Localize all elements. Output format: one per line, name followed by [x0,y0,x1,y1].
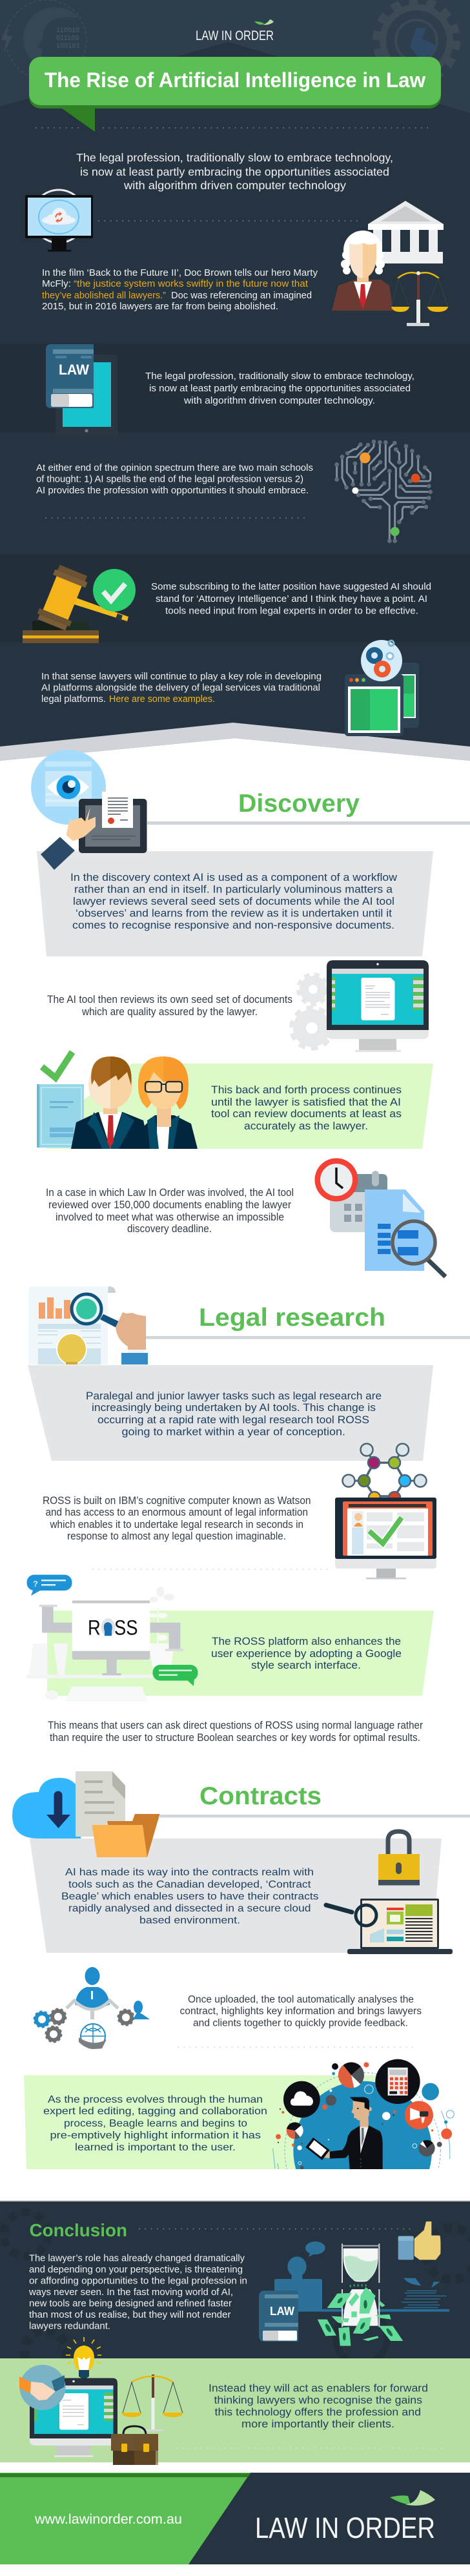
icon: laptop with magnifier [326,1899,453,1954]
back and forth paragraph: tool can review documents at least as [211,1108,402,1120]
text: key role: AI platforms alongside the delivery of legal services via traditional [41,682,320,694]
discovery paragraph: In the discovery context AI is used as a component of a workflow [70,872,397,883]
icon: businessman with tablet and data bubbles [272,2059,455,2169]
icon: law book and tablet [46,344,118,438]
panel: conclusion [0,2200,470,2371]
text: Back to the Future [42,267,318,312]
dotted divider under title [36,127,431,129]
text: ROSS built on Watson [43,1495,311,1542]
small pies [287,2122,435,2156]
text: AI tool seed set: which are quality assured by the lawyer. [81,1006,258,1018]
text: schools of thought: AI provides the profession with opportunities it should embrace. [36,485,309,496]
conclusion paragraph: or affording opportunities to the legal profession in [29,2276,247,2286]
Beagle paragraph: learned is important to the user. [75,2142,236,2153]
table and silhouette [274,2241,449,2312]
conclusion paragraph: The lawyer’s role has already changed dramatically [29,2252,245,2264]
enablers paragraph [209,2383,428,2430]
ROSS platform paragraph: style search interface. [251,1660,361,1671]
chat bubble blue: ? [33,1579,38,1589]
text: ROSS built on Watson: and has access to an enormous amount of legal information [45,1507,308,1518]
heading: Contracts [159,1782,470,1817]
text: schools of thought: of thought: 1) AI spells the end of the legal profession versus 2) [36,474,303,484]
heading: Conclusion: Conclusion [30,2220,127,2240]
conclusion paragraph: than most of us realise, but they will not render [29,2309,231,2320]
contracts paragraph: based environment. [139,1915,240,1926]
text: key role: legal platforms. [41,694,106,705]
icon: conclusion illustration [259,2221,449,2346]
contracts paragraph: Beagle’ which enables users to have their contracts [61,1891,319,1902]
icon: monitor, bulb, handshake, scales and briefcase [19,2337,183,2465]
panel: enablers [0,2358,470,2462]
icon: monitor with check [335,1498,436,1580]
discovery paragraph: lawyer reviews several seed sets of documents while the AI tool [73,896,394,907]
text: once uploaded: contract, highlights key information and brings lawyers [179,2006,422,2017]
text: Back to the Future: 2015, but in 2016 lawyers are far from being abolished. [42,301,278,312]
logo: Law In Order (footer): LAW IN ORDER [255,2511,435,2544]
dotted divider [139,2228,411,2229]
discovery paragraph: comes to recognise responsive and non-responsive documents. [72,920,394,931]
icon: padlock [378,1831,420,1886]
pie chart top [338,2062,364,2088]
icon: cloud, document and folder [12,1771,160,1857]
computer [72,1600,150,1675]
discovery paragraph [70,872,397,931]
text: 150,000 documents [46,1187,294,1235]
intro text: The legal profession, traditionally slow to embrace technology, [76,151,393,164]
enablers paragraph: thinking lawyers who recognise the gains [214,2395,422,2406]
icon: tablet and phone with gears [345,640,419,736]
text: legal profession band: is now at least partly embracing the opportunities associated [149,383,411,394]
logo: Law In Order (top): LAW IN ORDER [196,28,274,43]
back and forth paragraph: until the lawyer is satisfied that the AI [211,1097,401,1108]
law book [259,2291,298,2342]
cloud badge [283,2081,320,2117]
logo: Law In Order (footer) [255,2490,435,2544]
footer URL: www.lawinorder.com.au [34,2512,182,2527]
text: direct questions of ROSS [48,1720,423,1744]
text: Back to the Future: “the justice system works swiftly in the future now that [74,278,309,289]
discovery paragraph: rather than an end in itself. In particularly voluminous matters a [74,884,393,896]
text: Back to the Future: they’ve abolished all lawyers.” [42,290,166,301]
text: once uploaded [179,1994,422,2029]
contracts paragraph [61,1867,319,1926]
icon: courthouse [368,201,444,263]
text: key role: Here are some examples. [109,694,215,705]
text: direct questions of ROSS: than require the user to structure Boolean searches or key words for optimal results. [50,1732,420,1744]
icon: circuit brain [334,440,433,543]
icon: lawyers with document and check [37,1052,198,1149]
intro text: with algorithm driven computer technology [123,179,346,192]
Beagle paragraph [43,2094,267,2153]
lightbulb [66,2337,101,2378]
icon: molecule network [342,1444,426,1503]
conclusion paragraph: and depending on your perspective, is threatening [29,2264,243,2275]
conclusion paragraph: ways never seen. In the fast moving world of AI, [28,2287,233,2298]
text: key role [41,671,322,705]
dotted divider [93,1569,328,1570]
panel: discovery text [37,851,433,956]
title text: The Rise of Artificial Intelligence in Law [45,68,425,92]
decoration: faint gears [4,2212,470,2371]
floating dots [276,2062,454,2170]
legal research paragraph: occurring at a rapid rate with legal research tool ROSS [97,1414,369,1426]
text: ROSS built on Watson: which enables it to undertake legal research in seconds in [50,1519,303,1530]
megaphone badge [405,2101,433,2129]
text: schools of thought: At either end of the opinion spectrum there are two main schools [36,462,313,473]
businessman [305,2097,383,2169]
text: Back to the Future: McFly: [42,278,71,289]
icon: clock, calendar and search document [315,1159,445,1277]
ROSS platform paragraph: The ROSS platform also enhances the [212,1636,401,1647]
conclusion paragraph: new tools are being designed and refined faster [29,2298,232,2309]
heading: Legal research [146,1304,470,1339]
text: Attorney Intelligence: stand for ‘Attorney Intelligence’ and I think they have a point. AI [156,593,427,604]
conclusion paragraph: lawyers redundant. [29,2321,110,2331]
icon: gavel and check mark [23,564,136,643]
text: 150,000 documents: discovery deadline. [127,1223,212,1235]
icon: monitor with cloud sync [25,190,93,252]
text: legal profession band [145,371,414,406]
back and forth paragraph: This back and forth process continues [211,1084,402,1096]
text: legal profession band: The legal profession, traditionally slow to embrace technology, [145,371,414,382]
calculator badge [375,2059,420,2104]
dotted divider [46,517,306,519]
text: 150,000 documents: involved to meet what was otherwise an impossible [56,1211,284,1223]
panel: Beagle learns [24,2076,404,2169]
heading: Discovery: Discovery [238,790,360,818]
icon: judge with wig [332,231,393,311]
ROSS platform paragraph [211,1636,402,1671]
heading: Legal research: Legal research [199,1304,385,1332]
chat bubble blue [27,1574,72,1596]
text: Attorney Intelligence: tools need input from legal experts in order to be effective. [165,606,418,616]
decoration: head silhouette: 100101 [56,42,80,50]
legal research paragraph: increasingly being undertaken by AI tools. This change is [92,1402,376,1414]
hourglass [342,2243,380,2327]
handshake [19,2365,66,2410]
text: 150,000 documents: In a case in which Law In Order was involved, the AI tool [46,1187,294,1199]
panel: back and forth [46,1064,433,1149]
decoration: head silhouette: 110010 [56,26,79,34]
logo: Law In Order (top) [196,19,274,43]
ROSS logo: ROSS [88,1616,138,1639]
text: ROSS built on Watson: ROSS is built on IBM’s cognitive computer known as Watson [43,1495,311,1507]
panel: legal research text [28,1365,433,1461]
discovery paragraph: ‘observes’ and learns from the review as it is undertaken until it [76,908,392,920]
icon: scales of justice [391,271,448,326]
law book: LAW [270,2305,294,2318]
text: once uploaded: Once uploaded, the tool automatically analyses the [188,1994,414,2005]
text: AI tool seed set [47,994,292,1018]
contracts paragraph: tools such as the Canadian developed, ‘Contract [68,1879,311,1890]
dotted divider [99,220,360,222]
paper stack [402,2278,447,2308]
back and forth paragraph: accurately as the lawyer. [244,1120,368,1132]
money [318,2287,403,2346]
intro text [76,151,393,192]
Beagle paragraph: process, Beagle learns and begins to [64,2118,247,2129]
enablers paragraph: more importantly their clients. [241,2418,394,2430]
scales [121,2375,183,2431]
text: ROSS built on Watson: response to almost any legal question imaginable. [67,1530,286,1542]
text: 150,000 documents: reviewed over 150,000 documents enabling the lawyer [48,1199,291,1211]
dark header background [0,0,470,775]
text: direct questions of ROSS: This means that users can ask direct questions of ROSS using normal language rather [48,1720,423,1731]
title speech bubble [29,57,441,132]
legal research paragraph: going to market within a year of conception. [121,1426,345,1437]
icon: law book and tablet: LAW [59,362,89,378]
woman [138,1056,198,1149]
text: Attorney Intelligence: Some subscribing to the latter position have suggested AI should [151,581,431,592]
icon: ROSS computer with chat bubbles [27,1587,183,1702]
legal research paragraph [86,1390,382,1437]
Beagle paragraph: expert led editing, tagging and collaboration [43,2106,267,2117]
Beagle paragraph: As the process evolves through the human [48,2094,263,2105]
white section with chevron edge [0,723,470,2201]
ROSS platform paragraph: user experience by adopting a Google [211,1648,402,1660]
icon: monitor and gears [292,960,429,1052]
text: key role: In that sense lawyers will continue to play a key role in developing [41,671,322,682]
dotted divider [178,2046,414,2048]
briefcase [111,2426,158,2465]
man [71,1056,150,1149]
legal research paragraph: Paralegal and junior lawyer tasks such as legal research are [86,1390,382,1402]
text: AI tool seed set: The AI tool then reviews its own seed set of documents [47,994,292,1005]
icon: research report with magnifier [28,1286,148,1365]
conclusion paragraph [28,2252,247,2331]
decoration: gear and wrench [376,1,456,81]
pipes [39,1605,183,1651]
text: Back to the Future: Doc was referencing an imagined [171,290,312,301]
panel: ROSS platform [47,1611,434,1696]
text: Back to the Future: In the film ‘Back to the Future II’, Doc Brown tells our hero Marty [42,267,318,278]
text: Attorney Intelligence [151,581,431,616]
dotted divider [177,2447,447,2449]
text: schools of thought [36,462,313,496]
plant and shelf items [27,1587,174,1678]
decoration: head silhouette [1,0,87,80]
back and forth paragraph [211,1084,402,1132]
chat bubble green [152,1665,198,1686]
footer [0,2473,470,2564]
contracts paragraph: rapidly analysed and dissected in a secure cloud [68,1903,311,1914]
panel: contracts text [30,1839,442,1953]
decoration: head silhouette: 011100 [56,34,79,42]
thumbs up [398,2221,440,2260]
text: once uploaded: and clients together to quickly provide feedback. [193,2017,408,2029]
icon: network of people and gears [34,1967,150,2049]
contracts paragraph: AI has made its way into the contracts realm with [65,1867,314,1878]
Beagle paragraph: pre-emptively highlight information it has [50,2130,261,2141]
intro text: is now at least partly embracing the opportunities associated [80,165,389,178]
heading: Discovery [147,790,470,825]
enablers paragraph: Instead they will act as enablers for forward [209,2383,428,2395]
text: legal profession band: with algorithm driven computer technology. [183,395,375,406]
enablers paragraph: this technology offers the profession and [214,2406,421,2418]
icon: eye, tablet and hand [31,750,147,870]
heading: Contracts: Contracts [199,1782,322,1810]
